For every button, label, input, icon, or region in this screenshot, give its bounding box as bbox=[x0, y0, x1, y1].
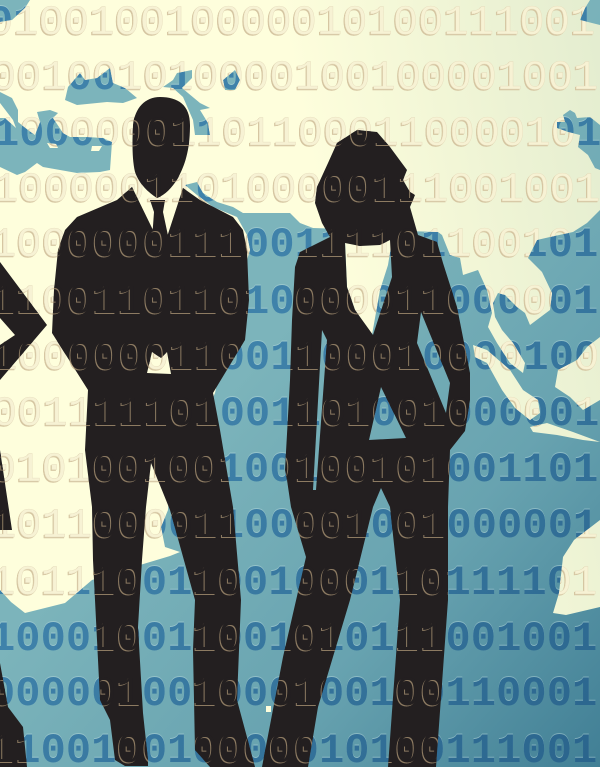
binary rows over sea: 000001001000100100110001 bbox=[0, 670, 597, 718]
silhouettes: businessman, businesswoman and partial figure: 001111101001101001000001 bbox=[0, 390, 599, 438]
binary rows over sea: 010100100100100101001101 bbox=[0, 446, 598, 494]
silhouettes: businessman, businesswoman and partial figure: 101100001100001001000001 bbox=[0, 502, 598, 550]
binary rows over sea: 100000011001100010000100 bbox=[0, 334, 599, 382]
world map land: 100000011001100010000100 bbox=[0, 334, 599, 382]
world map land: 001001010000100100001001 bbox=[0, 54, 598, 102]
silhouettes: businessman, businesswoman and partial figure: 000001001000100100110001 bbox=[0, 670, 597, 718]
silhouettes: businessman, businesswoman and partial figure: 110011011010000011000001 bbox=[0, 278, 598, 326]
world map land: 101110011001000110111101 bbox=[0, 559, 597, 607]
silhouettes: businessman, businesswoman and partial figure: 101110011001000110111101 bbox=[0, 559, 597, 607]
silhouettes: businessman, businesswoman and partial figure bbox=[0, 97, 470, 767]
silhouettes: businessman, businesswoman and partial figure: 100010011001010111001001 bbox=[0, 615, 597, 663]
binary rows over sea: 101110011001000110111101 bbox=[0, 559, 597, 607]
world map land: 010100100100100101001101 bbox=[0, 446, 598, 494]
binary rows over sea: 100000011100111101100101 bbox=[0, 221, 598, 269]
world map land: 001111101001101001000001 bbox=[0, 390, 599, 438]
silhouettes: businessman, businesswoman and partial figure: 001001010000100100001001 bbox=[0, 54, 598, 102]
binary rows over sea: 110011011010000011000001 bbox=[0, 278, 598, 326]
silhouettes: businessman, businesswoman and partial figure: 100000110100000111001001 bbox=[0, 166, 600, 214]
binary rows over sea: 100000011011000110000101 bbox=[0, 110, 600, 158]
silhouettes: businessman, businesswoman and partial figure: 100000011011000110000101 bbox=[0, 110, 600, 158]
world map land: 110011011010000011000001 bbox=[0, 278, 598, 326]
binary rows over sea: 100000110100000111001001 bbox=[0, 166, 600, 214]
silhouettes: businessman, businesswoman and partial figure: 010100100100100101001101 bbox=[0, 446, 598, 494]
world map land: 100000110100000111001001 bbox=[0, 166, 600, 214]
binary rows over sea: 001111101001101001000001 bbox=[0, 390, 599, 438]
silhouettes: businessman, businesswoman and partial figure: 100000011100111101100101 bbox=[0, 221, 598, 269]
silhouettes: businessman, businesswoman and partial figure: 100000011001100010000100 bbox=[0, 334, 599, 382]
world map land: 101100001100001001000001 bbox=[0, 502, 598, 550]
binary rows over sea: 001001010000100100001001 bbox=[0, 54, 598, 102]
world map land: 100000011011000110000101 bbox=[0, 110, 600, 158]
binary rows over sea: 101100001100001001000001 bbox=[0, 502, 598, 550]
world map land: 100000011100111101100101 bbox=[0, 221, 598, 269]
binary rows over sea: 100010011001010111001001 bbox=[0, 615, 597, 663]
